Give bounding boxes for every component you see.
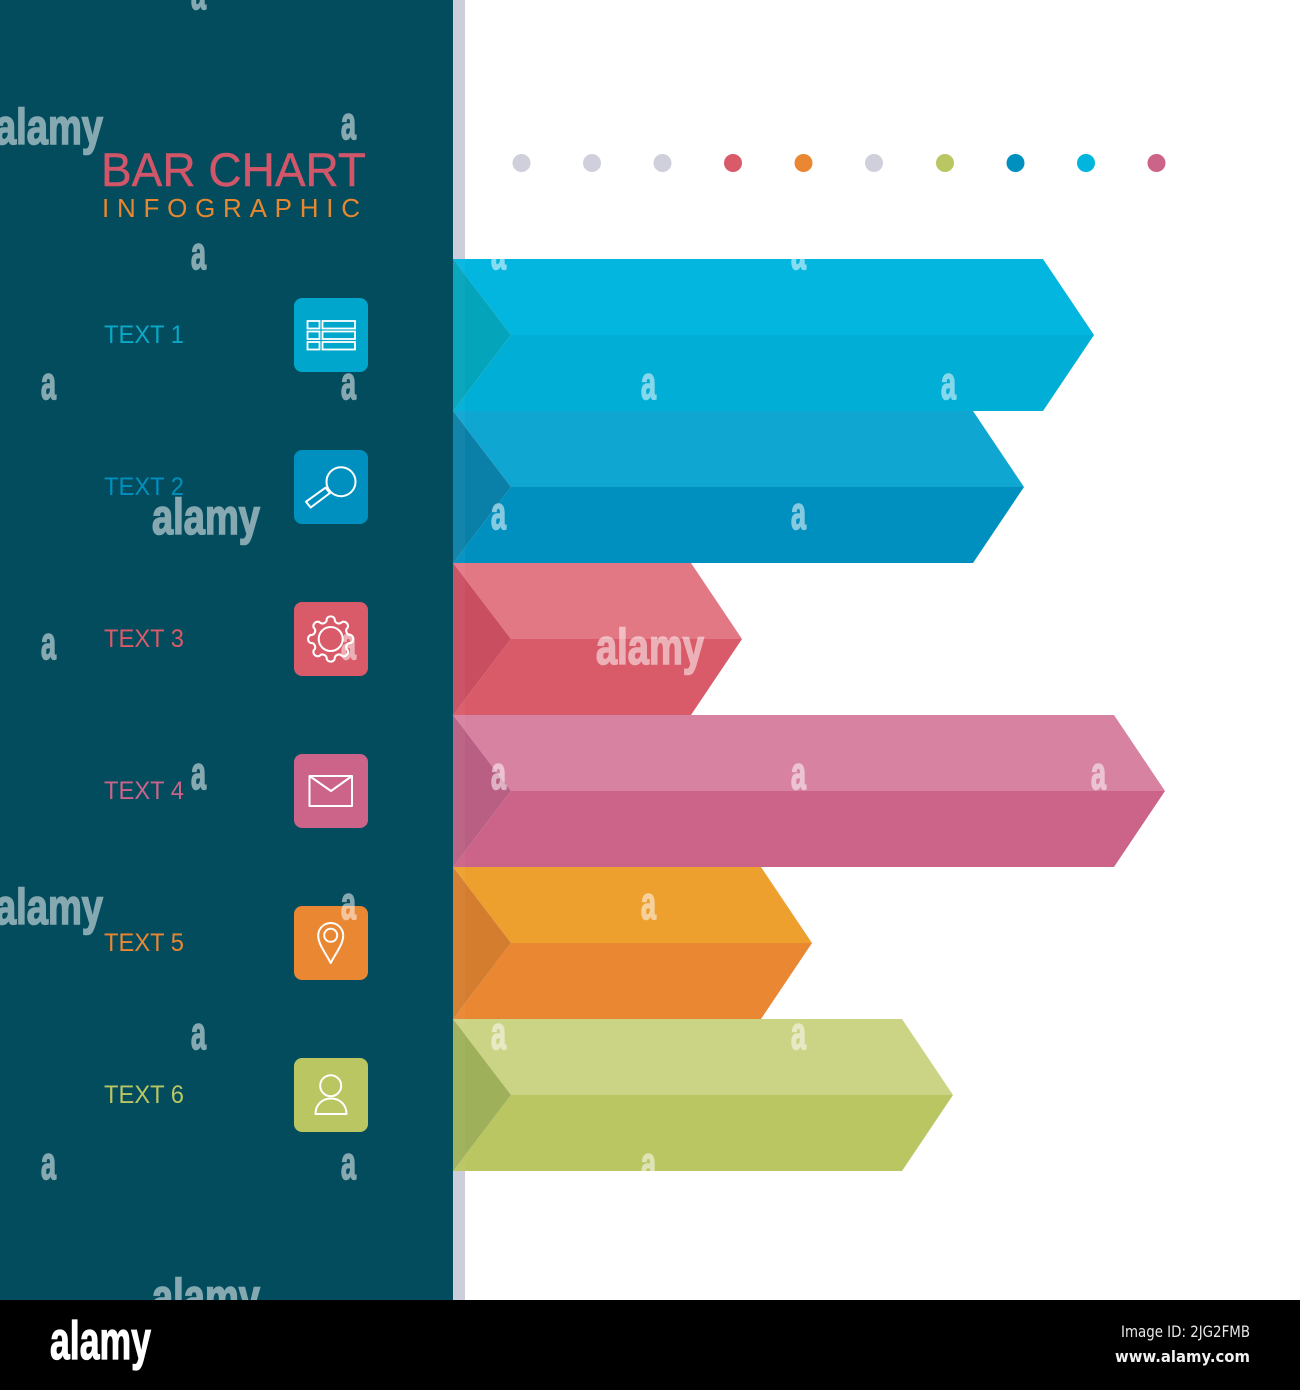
bar 1 xyxy=(453,259,1094,411)
watermarks: a xyxy=(191,1007,206,1059)
watermarks: a xyxy=(191,747,206,799)
watermarks: a xyxy=(41,1137,56,1189)
panel: left sidebar xyxy=(0,0,453,1300)
watermarks: a xyxy=(491,747,506,799)
bar 4 xyxy=(453,715,1165,867)
footer bar xyxy=(0,1300,1300,1390)
watermarks: alamy xyxy=(152,489,260,545)
watermarks: a xyxy=(641,1137,656,1189)
icon: person xyxy=(294,1058,368,1132)
watermarks: a xyxy=(191,227,206,279)
watermarks: a xyxy=(41,357,56,409)
watermarks: a xyxy=(941,357,956,409)
watermarks: a xyxy=(1091,747,1106,799)
watermarks: a xyxy=(791,487,806,539)
bar 2 xyxy=(453,411,1024,563)
label: text 5: TEXT 5 xyxy=(104,929,184,957)
watermarks: a xyxy=(491,227,506,279)
watermarks: a xyxy=(491,1007,506,1059)
icon: envelope xyxy=(294,754,368,828)
watermarks: a xyxy=(341,1137,356,1189)
bar chart xyxy=(453,259,1165,1171)
icon: gear xyxy=(294,602,368,676)
bar 3 xyxy=(453,563,742,715)
watermarks: a xyxy=(41,617,56,669)
watermarks: a xyxy=(341,877,356,929)
icon: map pin xyxy=(294,906,368,980)
image id: Image ID: 2JG2FMB xyxy=(1121,1322,1250,1341)
row labels xyxy=(104,321,184,1109)
label: text 6: TEXT 6 xyxy=(104,1081,184,1109)
bar 5 xyxy=(453,867,812,1019)
label: text 2: TEXT 2 xyxy=(104,473,184,501)
bar 6 xyxy=(453,1019,953,1171)
panel edge strip xyxy=(453,0,465,1300)
subtitle: INFOGRAPHIC xyxy=(102,193,360,223)
watermarks: a xyxy=(641,357,656,409)
watermarks: a xyxy=(641,877,656,929)
label: text 1: TEXT 1 xyxy=(104,321,184,349)
footer logo: alamy xyxy=(50,1311,151,1371)
title block xyxy=(101,143,366,223)
label: text 4: TEXT 4 xyxy=(104,777,184,805)
watermarks: a xyxy=(791,1007,806,1059)
icon: magnifier xyxy=(294,450,368,524)
watermarks: a xyxy=(341,97,356,149)
website: www.alamy.com xyxy=(1115,1347,1250,1366)
icon: table xyxy=(294,298,368,372)
watermarks: a xyxy=(791,747,806,799)
watermarks: a xyxy=(791,227,806,279)
label: text 3: TEXT 3 xyxy=(104,625,184,653)
watermarks: alamy xyxy=(152,1269,260,1325)
watermarks: a xyxy=(341,617,356,669)
watermarks: a xyxy=(341,357,356,409)
legend dots xyxy=(512,154,1166,172)
watermarks: alamy xyxy=(596,619,704,675)
watermarks: a xyxy=(491,487,506,539)
title: BAR CHART xyxy=(101,143,366,196)
